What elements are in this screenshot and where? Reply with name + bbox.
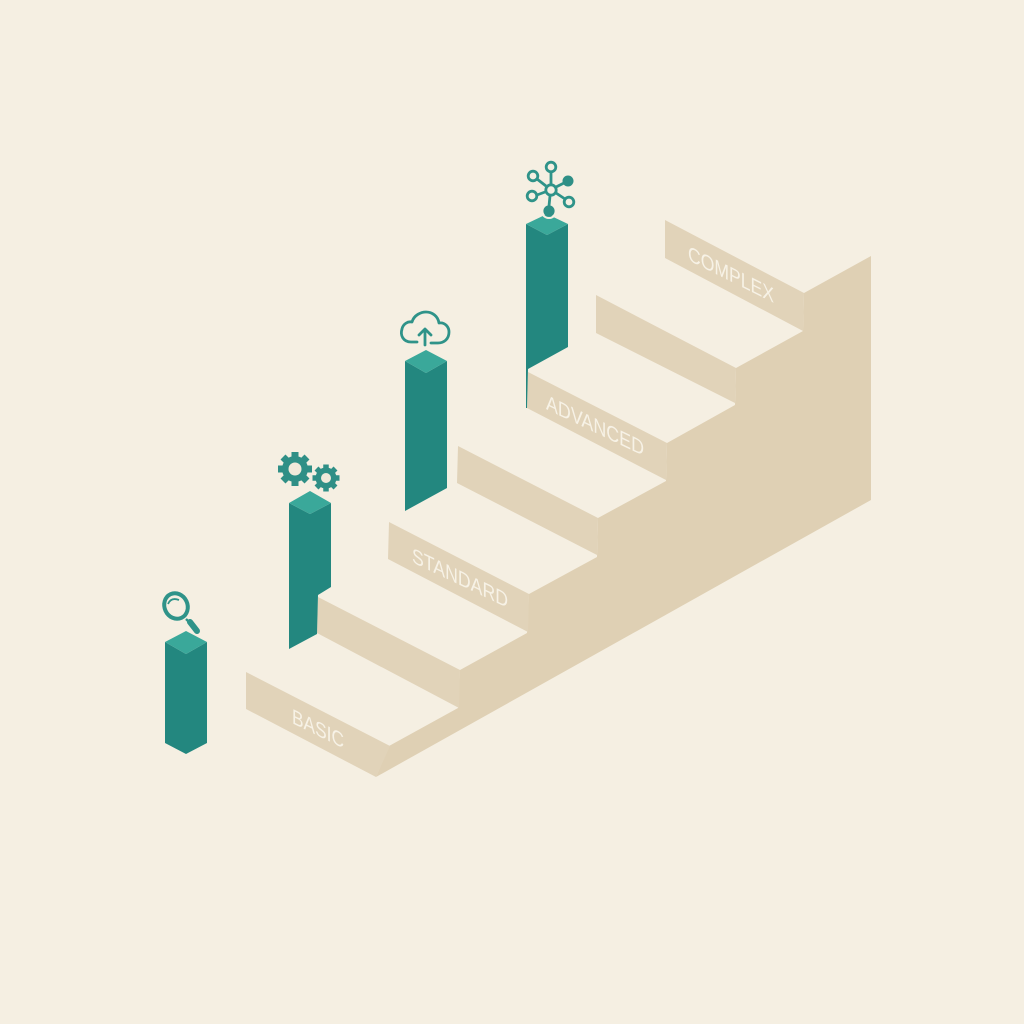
step 6 riser [596,295,736,403]
step 1: basic [246,672,390,777]
icon: network hub [527,162,574,218]
teal bar 3 [405,350,447,511]
icon: gears [278,452,340,492]
step 3: standard [388,522,529,632]
staircase side wall [376,256,871,777]
icon: magnifying glass [160,589,197,631]
teal bar 2 [289,491,331,649]
step 2 riser [317,597,460,708]
teal bar 4 [526,214,568,408]
large gear [278,452,312,486]
step 5: advanced [527,372,667,480]
label: complex: COMPLEX [688,241,774,308]
small gear [312,464,340,492]
teal bar 1 [165,631,207,754]
label: advanced: ADVANCED [546,390,644,461]
label: standard: STANDARD [412,543,508,613]
label: basic: BASIC [292,704,344,753]
step 7: complex [665,220,804,331]
step 4 riser [457,446,598,555]
icon: cloud upload [401,312,449,345]
